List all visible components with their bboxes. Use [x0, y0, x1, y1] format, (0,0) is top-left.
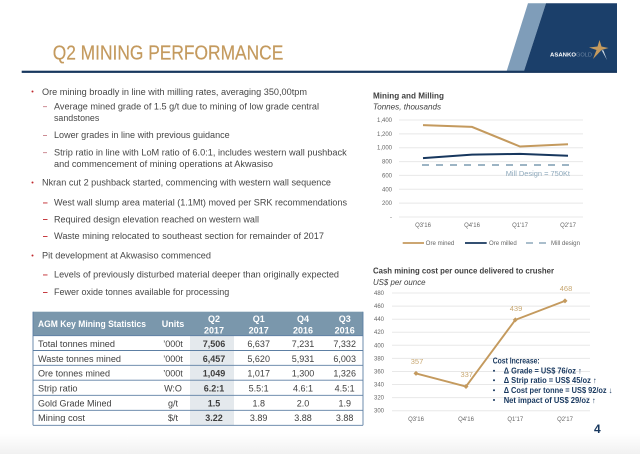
line: ore milled	[423, 154, 568, 158]
chart: mining and milling: Q1'17	[512, 223, 529, 229]
chart: cash mining cost: Q2'17	[557, 417, 574, 423]
table rows: 6,457	[203, 354, 225, 364]
table rows: Waste tonnes mined	[38, 354, 121, 364]
table rows: 4.5:1	[335, 384, 355, 394]
table header: Q3	[339, 314, 351, 324]
bullet list: Strip ratio in line with LoM ratio of 6.0:1, includes western wall pushback	[54, 147, 347, 157]
bullet list: Nkran cut 2 pushback started, commencing with western wall sequence	[42, 178, 331, 188]
table rows: ’000t	[163, 368, 183, 378]
chart legend: Ore mined	[426, 241, 454, 247]
table rows: 1,300	[292, 368, 314, 378]
table rows: 3.22	[205, 413, 223, 423]
table rows: Ore tonnes mined	[38, 368, 110, 378]
table rows: 7,506	[203, 339, 225, 349]
chart: cash mining cost: 400	[374, 343, 385, 349]
bullet list: Levels of previously disturbed material deeper than originally expected	[54, 270, 339, 280]
table rows: ’000t	[163, 339, 183, 349]
page number: 4	[594, 422, 601, 436]
value labels: 337	[460, 370, 473, 379]
logo: GOLD	[576, 52, 592, 58]
table rows: 6,003	[333, 354, 356, 364]
chart: mining and milling: Mining and Milling	[373, 90, 444, 100]
table header	[38, 314, 355, 336]
chart: cash mining cost: Q3'16	[408, 417, 425, 423]
table header: Q1	[253, 314, 265, 324]
callout: cost increase: Net impact of US$ 29/oz ↑	[504, 396, 596, 405]
mill design label: Mill Design = 750Kt	[506, 169, 571, 178]
chart: cash mining cost: 340	[374, 382, 385, 388]
callout: cost increase	[493, 356, 612, 405]
chart legend	[403, 241, 580, 247]
table rows: 5.5:1	[249, 384, 269, 394]
bullet list: and commencement of mining operations at Akwasiso	[54, 159, 273, 169]
table rows: 3.88	[294, 413, 312, 423]
table rows: ’000t	[163, 354, 183, 364]
chart: mining and milling: Q4'16	[464, 223, 481, 229]
table header: Q4	[297, 314, 309, 324]
value labels: 468	[560, 284, 572, 293]
value labels: 357	[411, 357, 423, 366]
table header: AGM Key Mining Statistics	[38, 319, 146, 329]
chart: mining and milling: 1,200	[377, 132, 393, 138]
chart: mining and milling: 800	[382, 160, 393, 166]
chart: cash mining cost: Cash mining cost per ounce delivered to crusher	[373, 266, 555, 276]
title: Q2 MINING PERFORMANCE	[53, 42, 283, 64]
table rows: Gold Grade Mined	[38, 398, 112, 408]
chart: cash mining cost: 300	[374, 409, 385, 415]
callout: cost increase: Δ Grade = US$ 76/oz ↑	[504, 366, 582, 376]
logo	[550, 40, 608, 60]
chart: cash mining cost: 420	[374, 330, 385, 336]
table rows: 1.8	[252, 398, 265, 408]
chart: mining and milling: 1,400	[377, 118, 393, 124]
table rows: 3.88	[336, 413, 353, 423]
chart: mining and milling: 200	[382, 201, 393, 207]
table rows: 1,326	[333, 368, 356, 378]
table rows: 5,931	[292, 354, 314, 364]
table rows: 7,332	[333, 339, 356, 349]
statistics table	[33, 312, 363, 425]
chart: mining and milling: Q2'17	[560, 223, 577, 229]
chart: mining and milling: 400	[382, 187, 393, 193]
cost chart subtitle: US$ per ounce	[373, 277, 426, 287]
table rows: 4.6:1	[293, 384, 313, 394]
table rows: 1,017	[247, 368, 270, 378]
table rows: Mining cost	[38, 413, 86, 423]
table rows: 1,049	[203, 368, 225, 378]
table header: 2016	[335, 326, 355, 336]
chart: cash mining cost: 440	[374, 317, 385, 323]
callout: cost increase: Cost Increase:	[493, 356, 540, 366]
table header: 2017	[204, 326, 224, 336]
line: mill design	[422, 164, 570, 166]
chart: mining and milling: Q3'16	[415, 223, 432, 229]
table rows: 1.5	[208, 398, 220, 408]
chart: cash mining cost: 480	[374, 291, 385, 297]
bullet list	[32, 87, 347, 297]
table rows	[38, 339, 356, 423]
chart: mining and milling: 1,000	[377, 146, 393, 152]
chart legend: Ore milled	[489, 241, 517, 247]
table rows: 1.9	[338, 398, 351, 408]
chart: mining and milling: 600	[382, 173, 393, 179]
bullet list: Required design elevation reached on western wall	[54, 214, 259, 224]
logo: ASANKO	[550, 52, 577, 58]
chart: cash mining cost: 320	[374, 396, 385, 402]
chart: mining and milling: -	[390, 215, 392, 221]
table rows: 5,620	[247, 354, 270, 364]
bullet list: Ore mining broadly in line with milling rates, averaging 350,00tpm	[42, 87, 307, 97]
table rows: 2.0	[297, 398, 309, 408]
bullet list: Waste mining relocated to southeast section for remainder of 2017	[54, 231, 324, 241]
table rows: W:O	[164, 384, 182, 394]
table rows: $/t	[168, 413, 178, 423]
bullet list: Pit development at Akwasiso commenced	[42, 251, 211, 261]
value labels	[411, 284, 572, 379]
callout: cost increase: Δ Strip ratio = US$ 45/oz ↑	[504, 376, 597, 385]
chart: cash mining cost: 460	[374, 304, 385, 310]
chart subtitle: Tonnes, thousands	[373, 102, 442, 112]
bullet list: Fewer oxide tonnes available for processing	[54, 287, 229, 297]
table header: Units	[162, 319, 184, 329]
callout: cost increase: Δ Cost per tonne = US$ 92/oz ↓	[504, 386, 612, 395]
bullet list: sandstones	[54, 113, 100, 123]
chart: cash mining cost: 360	[374, 370, 385, 376]
bullet list: Average mined grade of 1.5 g/t due to mining of low grade central	[54, 101, 319, 111]
cost line	[414, 298, 568, 389]
chart legend: Mill design	[551, 241, 580, 247]
table rows: 6.2:1	[204, 384, 224, 394]
line: ore mined	[423, 125, 568, 146]
chart: mining and milling	[373, 90, 583, 247]
table rows: 6,637	[247, 339, 270, 349]
chart: cash mining cost: Q1'17	[507, 417, 524, 423]
table rows: Strip ratio	[38, 384, 78, 394]
value labels: 439	[510, 304, 522, 313]
chart: cash mining cost: 380	[374, 356, 385, 362]
table rows: Total tonnes mined	[38, 339, 115, 349]
table header: Q2	[208, 314, 220, 324]
table rows: 3.89	[250, 413, 267, 423]
table header: 2017	[249, 326, 269, 336]
table rows: 7,231	[292, 339, 314, 349]
chart: cash mining cost	[373, 266, 612, 423]
table header: 2016	[293, 326, 313, 336]
header banner	[22, 3, 617, 73]
bullet list: West wall slump area material (1.1Mt) moved per SRK recommendations	[54, 198, 347, 208]
table rows: g/t	[168, 398, 178, 408]
bullet list: Lower grades in line with previous guidance	[54, 130, 230, 140]
chart: cash mining cost: Q4'16	[458, 417, 475, 423]
